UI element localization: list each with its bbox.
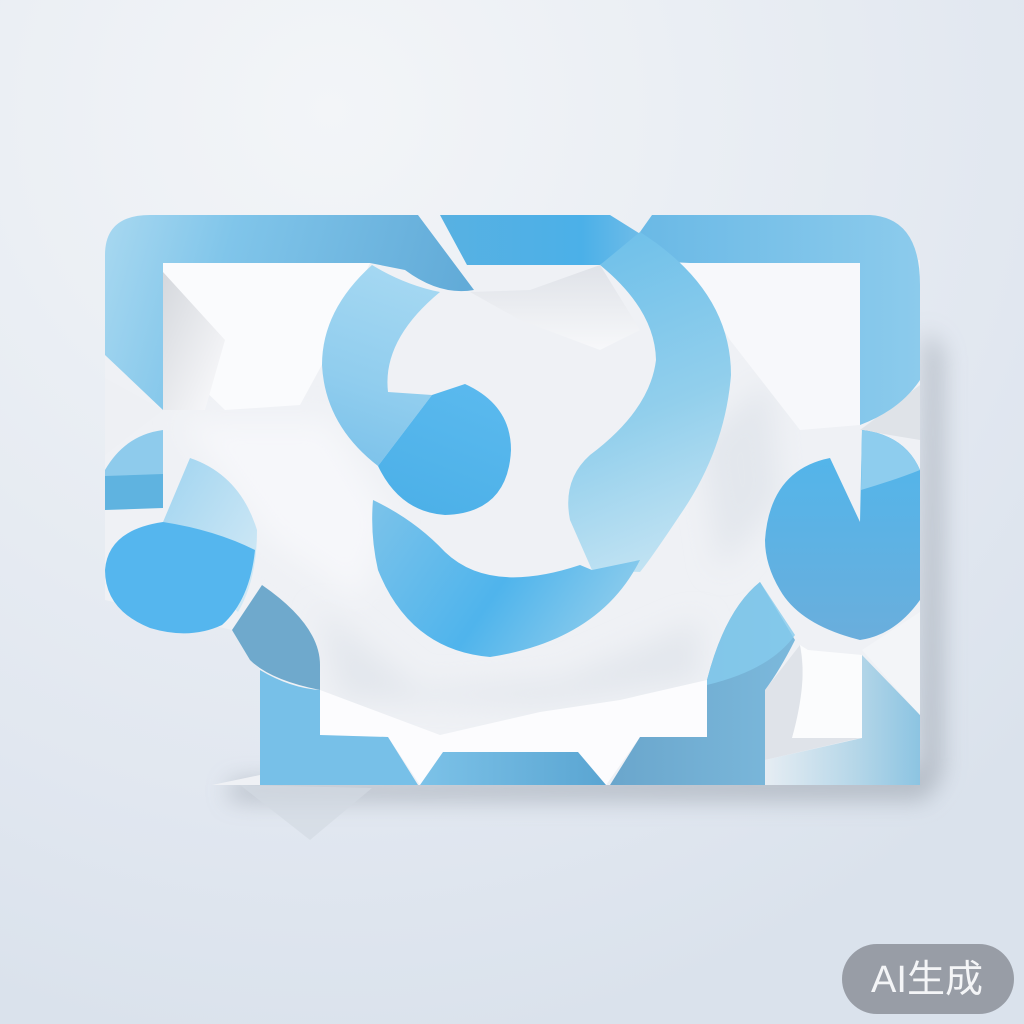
bottom right frame <box>610 582 795 785</box>
right circle pale top band <box>861 430 920 490</box>
paper fold: lower right gray strip <box>765 645 860 760</box>
lower left frame curve <box>232 585 320 690</box>
white paper sheet <box>105 260 920 785</box>
drop shadow <box>230 330 942 840</box>
left pale circle top <box>163 458 257 612</box>
lower arc <box>372 500 640 657</box>
left inner arc <box>322 265 440 466</box>
paper fold: upper left <box>163 263 370 410</box>
paper fold: left edge white triangle <box>105 378 163 455</box>
right blue circle <box>765 430 920 640</box>
paper shading: lower field <box>320 610 700 705</box>
watermark badge <box>842 944 1014 1014</box>
paper fold: upper right <box>680 263 860 430</box>
watermark badge: AI生成 <box>871 959 983 1001</box>
large ring arc right <box>568 232 731 572</box>
paper fold: lower white sheet <box>320 680 707 785</box>
paper fold: left crease <box>163 272 225 410</box>
central blue circle <box>378 384 511 515</box>
diagonal ground shadow <box>240 785 372 840</box>
bottom right corner <box>765 655 920 785</box>
top left frame band <box>105 215 474 410</box>
left blue circle <box>105 522 255 633</box>
white sliver bottom right <box>792 645 862 738</box>
paper shading: right field <box>700 380 780 570</box>
left side pieces <box>105 430 163 510</box>
paper fold: center top <box>470 265 640 350</box>
right corner white triangle <box>862 612 920 715</box>
left band upper <box>105 430 163 482</box>
bottom right pale overlay <box>707 582 795 685</box>
top right frame band <box>640 215 920 425</box>
left band lower <box>105 474 163 510</box>
top centre band <box>440 215 642 265</box>
paper fold: right edge <box>860 385 920 440</box>
paper shading: left light swoosh <box>180 420 390 600</box>
bottom left frame <box>260 670 418 785</box>
bottom centre frame <box>420 752 606 785</box>
